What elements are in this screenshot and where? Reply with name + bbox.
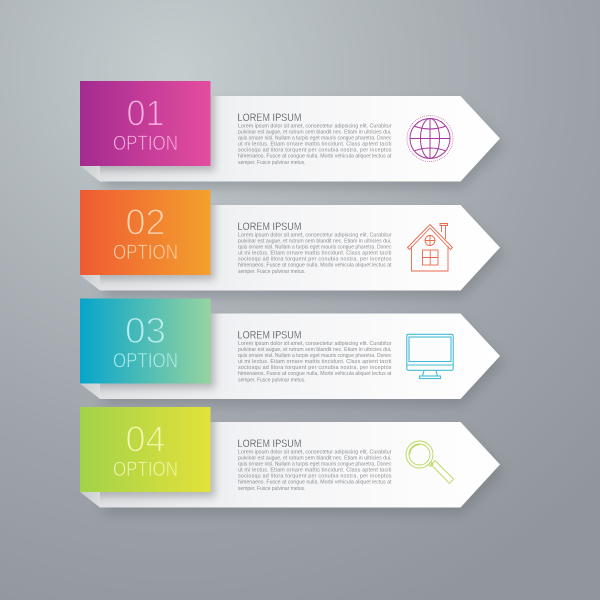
option label 01: OPTION	[113, 132, 178, 155]
card shadow on arrow 02	[100, 205, 220, 284]
body text 04: semper. Fusce pulvinar metus.	[238, 486, 306, 492]
arrow shadow 02	[104, 213, 504, 297]
body text 02: ut mi lectus. Etiam ornare mattis tincidunt. Class aptent taciti	[238, 251, 392, 257]
arrow shadow 04	[104, 430, 504, 514]
card shadow on arrow 04	[100, 422, 220, 502]
body text 02: quis ornare nisl. Nullam a turpis eget mauris congue pharetra. Donec	[238, 244, 392, 250]
body text 02: sociosqu ad litora torquent per conubia nostra, per inceptos	[238, 257, 392, 263]
card shadow on arrow 01	[100, 96, 220, 175]
icon: magnifier	[406, 441, 454, 484]
option label 03: OPTION	[113, 350, 178, 372]
body text 01: pulvinar est augue, et rutrum sem blandit nec. Etiam in ultricies dui,	[238, 130, 392, 136]
arrow panel 04	[100, 422, 500, 508]
body text 01: sociosqu ad litora torquent per conubia nostra, per inceptos	[238, 148, 392, 154]
card shadow on arrow 03	[100, 314, 220, 392]
color card 02	[80, 190, 210, 275]
number 02: 02	[126, 202, 166, 242]
panel: option 03	[80, 298, 504, 406]
body text 01: semper. Fusce pulvinar metus.	[238, 160, 306, 166]
body text 03: semper. Fusce pulvinar metus.	[238, 377, 306, 383]
body text 04: pulvinar est augue, et rutrum sem blandit nec. Etiam in ultricies dui,	[238, 456, 392, 462]
arrow panel 03	[100, 314, 500, 399]
body text 03: pulvinar est augue, et rutrum sem blandit nec. Etiam in ultricies dui,	[238, 347, 392, 353]
body text 04	[238, 450, 392, 492]
body text 04: sociosqu ad litora torquent per conubia nostra, per inceptos	[238, 474, 392, 480]
body text 01: ut mi lectus. Etiam ornare mattis tincidunt. Class aptent taciti	[238, 142, 392, 148]
heading 04: LOREM IPSUM	[238, 438, 302, 450]
body text 02: himenaeos. Fusce at congue nulla. Morbi vehicula aliquet lectus at	[238, 263, 392, 269]
number 01: 01	[126, 92, 164, 134]
body text 01: Lorem ipsum dolor sit amet, consectetur adipiscing elit. Curabitur	[238, 124, 392, 130]
arrow shadow 01	[104, 104, 504, 188]
fold 01	[80, 166, 100, 182]
icon: globe	[407, 116, 453, 162]
fold 03	[80, 384, 100, 399]
body text 01: himenaeos. Fusce at congue nulla. Morbi vehicula aliquet lectus at	[238, 154, 392, 160]
body text 04: Lorem ipsum dolor sit amet, consectetur adipiscing elit. Curabitur	[238, 450, 392, 456]
arrow panel 01	[100, 96, 500, 182]
body text 02: Lorem ipsum dolor sit amet, consectetur adipiscing elit. Curabitur	[238, 232, 392, 238]
number 03: 03	[125, 310, 166, 351]
body text 02: semper. Fusce pulvinar metus.	[238, 269, 306, 275]
icon: house	[408, 224, 452, 271]
body text 04: quis ornare nisl. Nullam a turpis eget mauris congue pharetra. Donec	[238, 462, 392, 468]
color card 01	[80, 81, 210, 166]
body text 02: pulvinar est augue, et rutrum sem blandit nec. Etiam in ultricies dui,	[238, 238, 392, 244]
panel: option 02	[80, 190, 504, 297]
body text 04: himenaeos. Fusce at congue nulla. Morbi vehicula aliquet lectus at	[238, 480, 392, 486]
body text 03: quis ornare nisl. Nullam a turpis eget mauris congue pharetra. Donec	[238, 353, 392, 359]
body text 01: quis ornare nisl. Nullam a turpis eget mauris congue pharetra. Donec	[238, 136, 392, 142]
body text 03	[238, 341, 392, 383]
fold 04	[80, 492, 100, 508]
arrow shadow 03	[104, 322, 504, 406]
fold 02	[80, 275, 100, 290]
body text 03: ut mi lectus. Etiam ornare mattis tincidunt. Class aptent taciti	[238, 359, 392, 365]
arrow panel 02	[100, 205, 500, 290]
body text 01	[238, 124, 392, 166]
heading 02: LOREM IPSUM	[238, 221, 302, 233]
icon: monitor	[407, 334, 453, 378]
panel: option 01	[80, 81, 504, 188]
option label 04: OPTION	[113, 458, 178, 481]
body text 03: sociosqu ad litora torquent per conubia nostra, per inceptos	[238, 365, 392, 371]
option label 02: OPTION	[113, 241, 178, 264]
body text 03: Lorem ipsum dolor sit amet, consectetur adipiscing elit. Curabitur	[238, 341, 392, 347]
color card 04	[80, 407, 210, 492]
body text 03: himenaeos. Fusce at congue nulla. Morbi vehicula aliquet lectus at	[238, 371, 392, 377]
panel: option 04	[80, 407, 504, 514]
number 04: 04	[126, 418, 166, 460]
body text 02	[238, 232, 392, 275]
heading 01: LOREM IPSUM	[238, 112, 302, 124]
heading 03: LOREM IPSUM	[238, 330, 302, 342]
body text 04: ut mi lectus. Etiam ornare mattis tincidunt. Class aptent taciti	[238, 468, 392, 474]
color card 03	[80, 298, 210, 384]
